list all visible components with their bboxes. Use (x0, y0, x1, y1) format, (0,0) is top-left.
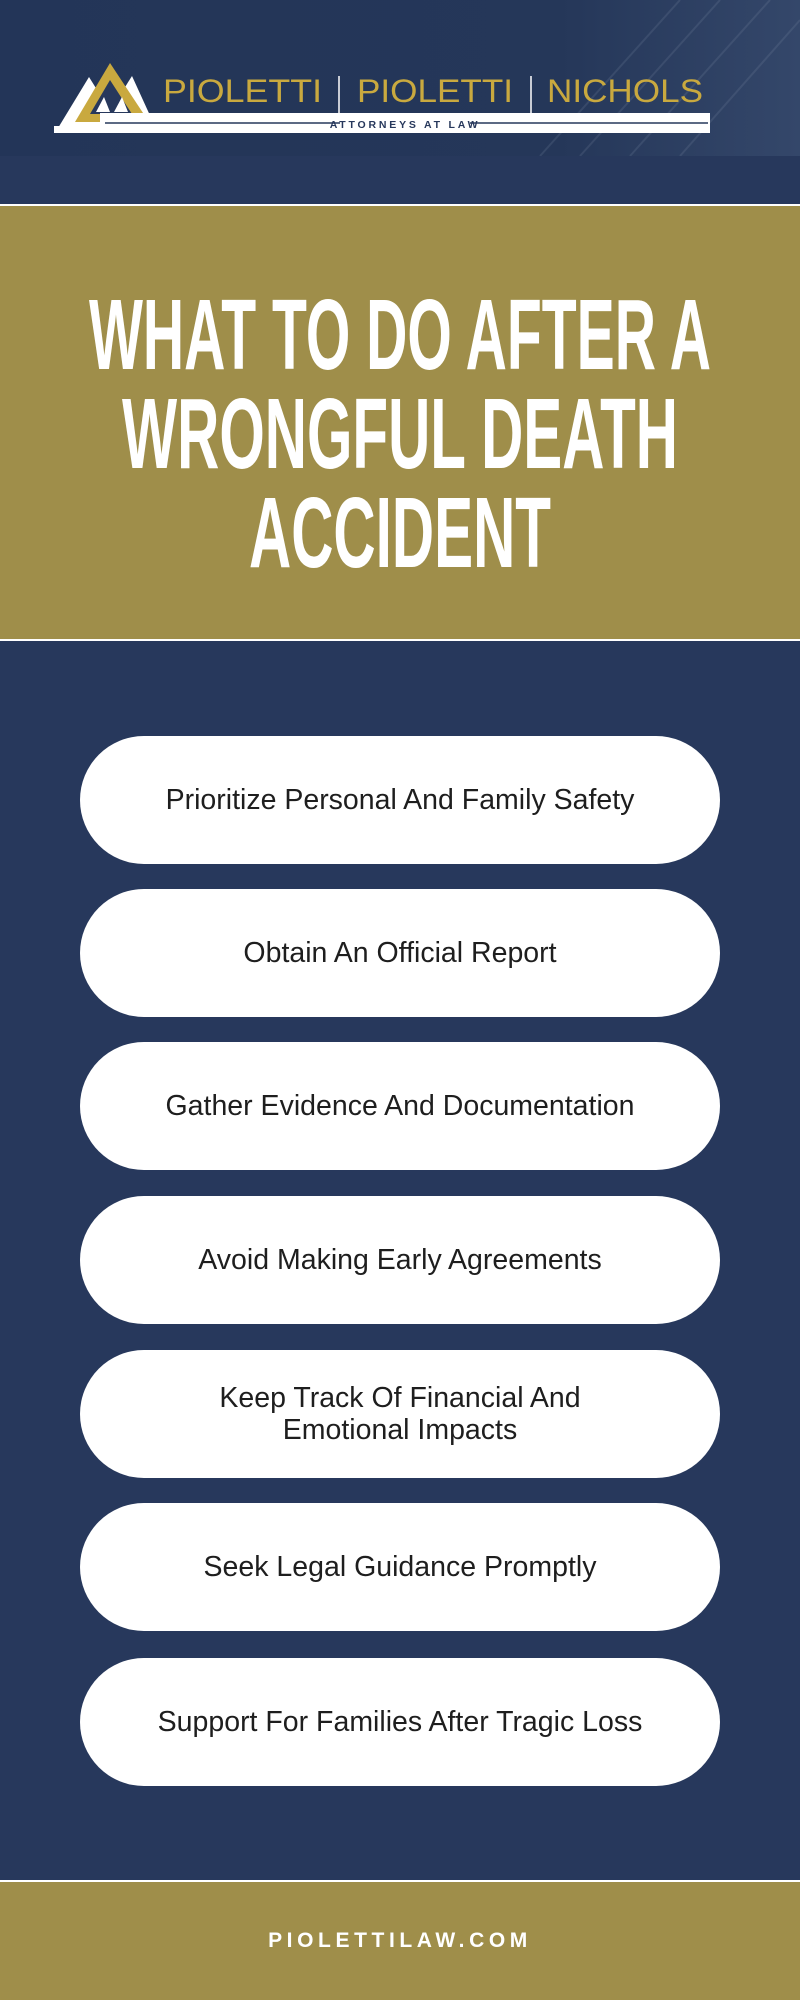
title (89, 279, 711, 589)
white underline bar (100, 113, 710, 133)
step 4: Avoid Making Early Agreements (198, 1244, 602, 1276)
step 6: Seek Legal Guidance Promptly (204, 1551, 596, 1583)
header banner (0, 0, 800, 156)
firm name: PIOLETTI (163, 73, 322, 109)
website url: PIOLETTILAW.COM (268, 1929, 532, 1952)
firm name: NICHOLS (547, 73, 703, 109)
firm name: PIOLETTI (357, 73, 513, 109)
step 2 (80, 889, 720, 1017)
step 7: Support For Families After Tragic Loss (158, 1706, 642, 1738)
step 5 (80, 1350, 720, 1478)
title: ACCIDENT (249, 477, 551, 589)
footer (0, 1880, 800, 2000)
firm name (163, 73, 703, 109)
step 4 (80, 1196, 720, 1324)
step 1 (80, 736, 720, 864)
step 7 (80, 1658, 720, 1786)
step 1: Prioritize Personal And Family Safety (166, 784, 634, 816)
step 3: Gather Evidence And Documentation (166, 1090, 634, 1122)
step 5: Emotional Impacts (283, 1414, 517, 1446)
logo (54, 63, 710, 133)
step 5: Keep Track Of Financial And (219, 1382, 581, 1414)
step 3 (80, 1042, 720, 1170)
icon: mountain triangles (55, 63, 158, 133)
step 6 (80, 1503, 720, 1631)
step 2: Obtain An Official Report (243, 937, 557, 969)
logo: ATTORNEYS AT LAW (330, 119, 480, 131)
title band (0, 204, 800, 641)
step list (80, 736, 720, 1786)
